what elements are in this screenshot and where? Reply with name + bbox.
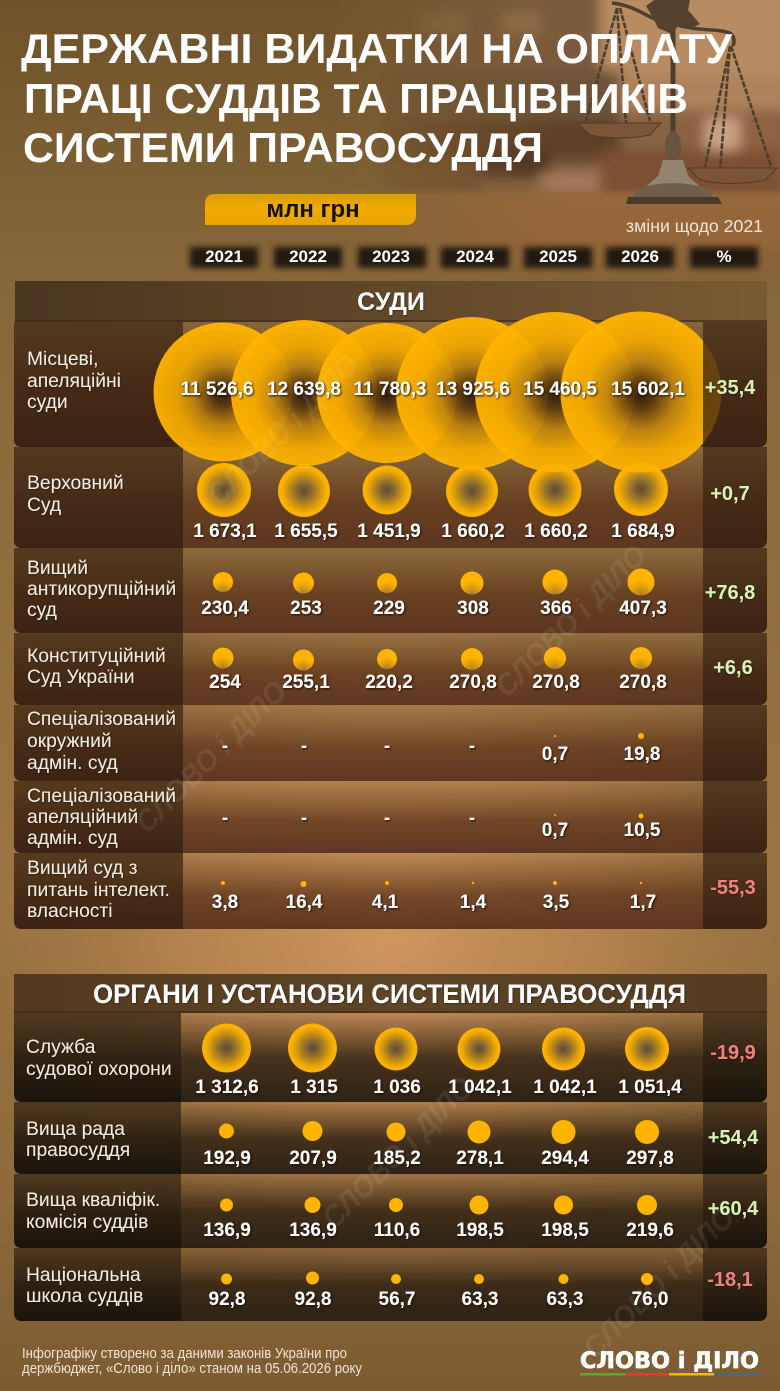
watermarks: СЛОВО і ДІЛО bbox=[314, 1069, 481, 1236]
panel: High Anti-Corruption Court row bbox=[14, 548, 767, 633]
panel: Specialized appeal admin court row: 0,7 bbox=[542, 820, 568, 841]
panel: local and appeal courts row: Місцеві, bbox=[27, 349, 98, 370]
panel: Constitutional Court row: 220,2 bbox=[365, 672, 413, 693]
panel: Court Security Service row: 1 042,1 bbox=[533, 1077, 597, 1098]
panel: High Anti-Corruption Court row: 366 bbox=[540, 598, 572, 619]
title: СИСТЕМИ ПРАВОСУДДЯ bbox=[23, 124, 543, 171]
panel: High Qualification Commission row: Вища кваліфік. bbox=[26, 1190, 160, 1211]
panel: National School of Judges row: Національна bbox=[26, 1265, 141, 1286]
panel: Specialized appeal admin court row: - bbox=[469, 808, 475, 829]
unit badge: млн грн: млн грн bbox=[266, 196, 360, 223]
panel: High Council of Justice row: 294,4 bbox=[541, 1148, 589, 1169]
panel: Specialized district admin court row bbox=[14, 705, 767, 781]
panel: National School of Judges row: 92,8 bbox=[209, 1289, 245, 1310]
year header: 2024 bbox=[456, 247, 494, 266]
panel: Constitutional Court row: +6,6 bbox=[713, 657, 753, 679]
panel: Court Security Service row: -19,9 bbox=[710, 1042, 756, 1064]
panel: High Qualification Commission row: +60,4 bbox=[708, 1198, 759, 1220]
panel: Court Security Service row: судової охорони bbox=[26, 1059, 172, 1080]
panel: Court Security Service row: 1 315 bbox=[290, 1077, 338, 1098]
year header: 2021 bbox=[205, 247, 243, 266]
panel: Constitutional Court row: 254 bbox=[209, 672, 241, 693]
year header: % bbox=[716, 247, 732, 266]
panel: National School of Judges row: 92,8 bbox=[295, 1289, 331, 1310]
panel: Specialized district admin court row: окружний bbox=[27, 731, 112, 752]
panel: Constitutional Court row: 255,1 bbox=[282, 672, 330, 693]
panel: High Qualification Commission row: 198,5 bbox=[541, 1220, 589, 1241]
panel: Specialized appeal admin court row bbox=[14, 781, 767, 853]
panel: High IP Court row: 3,8 bbox=[212, 892, 238, 913]
panel: Constitutional Court row: Конституційний bbox=[27, 646, 166, 667]
panel: Supreme Court row: 1 673,1 bbox=[193, 521, 257, 542]
panel: High Council of Justice row: 278,1 bbox=[456, 1148, 504, 1169]
panel: High IP Court row: 1,4 bbox=[460, 892, 487, 913]
unit badge: млн грн bbox=[205, 194, 416, 225]
panel: Specialized appeal admin court row: - bbox=[301, 808, 307, 829]
panel: High Anti-Corruption Court row: +76,8 bbox=[705, 582, 755, 604]
panel: Supreme Court row: 1 684,9 bbox=[611, 521, 675, 542]
panel: Court Security Service row: 1 036 bbox=[373, 1077, 421, 1098]
pans bbox=[577, 123, 661, 138]
footer source note: держбюджет, «Слово і діло» станом на 05.06.2026 року bbox=[22, 1361, 363, 1377]
panel: High Anti-Corruption Court row: 229 bbox=[373, 598, 405, 619]
watermarks: СЛОВО і ДІЛО bbox=[127, 673, 294, 840]
panel: local and appeal courts row: 11 780,3 bbox=[354, 379, 426, 400]
note: changes since 2021: зміни щодо 2021 bbox=[626, 216, 763, 236]
footer source note bbox=[22, 1346, 363, 1377]
panel: High Anti-Corruption Court row: 253 bbox=[290, 598, 322, 619]
panel: National School of Judges row: 56,7 bbox=[379, 1289, 415, 1310]
panel: High IP Court row: власності bbox=[27, 901, 113, 922]
panel: National School of Judges row: 63,3 bbox=[547, 1289, 583, 1310]
panel: High Qualification Commission row: 110,6 bbox=[374, 1220, 420, 1241]
panel: Supreme Court row: 1 451,9 bbox=[357, 521, 421, 542]
background photo: courtroom bbox=[393, 0, 780, 254]
panel: Specialized appeal admin court row: апеляційний bbox=[27, 807, 138, 828]
section heading: courts bbox=[15, 281, 767, 322]
year header: 2022 bbox=[289, 247, 327, 266]
title: ДЕРЖАВНІ ВИДАТКИ НА ОПЛАТУ bbox=[21, 25, 733, 72]
footer source note: Інфографіку створено за даними законів України про bbox=[22, 1346, 347, 1362]
panel: High IP Court row: 1,7 bbox=[630, 892, 656, 913]
panel: National School of Judges row bbox=[14, 1248, 767, 1321]
panel: National School of Judges row: 76,0 bbox=[632, 1289, 668, 1310]
watermarks bbox=[127, 346, 742, 1366]
panel: High IP Court row: 16,4 bbox=[286, 892, 323, 913]
panel: Supreme Court row: +0,7 bbox=[710, 483, 750, 505]
panel: Specialized district admin court row: 0,7 bbox=[542, 744, 568, 765]
panel: Specialized district admin court row: 19,8 bbox=[624, 744, 660, 765]
panel: High IP Court row: -55,3 bbox=[710, 877, 756, 899]
panel: High Qualification Commission row: 136,9 bbox=[289, 1220, 337, 1241]
panel: High Anti-Corruption Court row: 308 bbox=[457, 598, 489, 619]
panel: Constitutional Court row bbox=[14, 633, 767, 705]
panel: Supreme Court row: 1 660,2 bbox=[441, 521, 505, 542]
panel: High IP Court row bbox=[14, 853, 767, 929]
panel: High Council of Justice row bbox=[14, 1102, 767, 1174]
panel: local and appeal courts row: 12 639,8 bbox=[267, 379, 341, 400]
panel: Constitutional Court row: 270,8 bbox=[619, 672, 667, 693]
panel: Supreme Court row: Верховний bbox=[27, 473, 124, 494]
year header: 2023 bbox=[372, 247, 410, 266]
panel: High IP Court row: Вищий суд з bbox=[27, 858, 138, 879]
panel: local and appeal courts row: апеляційні bbox=[27, 371, 121, 392]
year header: 2025 bbox=[539, 247, 577, 266]
panel: Specialized appeal admin court row: адмін. суд bbox=[27, 828, 118, 849]
section heading: justice bodies bbox=[14, 974, 767, 1013]
panel: Specialized district admin court row: адмін. суд bbox=[27, 753, 118, 774]
panel: High Qualification Commission row bbox=[14, 1174, 767, 1248]
panel: local and appeal courts row: 13 925,6 bbox=[436, 379, 510, 400]
panel: National School of Judges row: школа суддів bbox=[26, 1286, 143, 1307]
panel: Specialized district admin court row: - bbox=[222, 736, 228, 757]
panel: Specialized district admin court row: - bbox=[469, 736, 475, 757]
panel: High Anti-Corruption Court row: антикорупційний bbox=[27, 579, 176, 600]
panel: High Qualification Commission row: 219,6 bbox=[626, 1220, 674, 1241]
panel: Specialized district admin court row: - bbox=[384, 736, 390, 757]
panel: High Council of Justice row: +54,4 bbox=[708, 1127, 759, 1149]
panel: High Council of Justice row: 185,2 bbox=[373, 1148, 421, 1169]
panel: Supreme Court row: 1 660,2 bbox=[524, 521, 588, 542]
panel: High Qualification Commission row: 136,9 bbox=[203, 1220, 251, 1241]
watermarks: СЛОВО і ДІЛО bbox=[575, 1199, 742, 1366]
panel: High Anti-Corruption Court row: 407,3 bbox=[619, 598, 667, 619]
panel: High IP Court row: питань інтелект. bbox=[27, 880, 170, 901]
panel: Court Security Service row: 1 312,6 bbox=[195, 1077, 259, 1098]
panel: Specialized appeal admin court row: - bbox=[384, 808, 390, 829]
panel: local and appeal courts row: 15 460,5 bbox=[523, 379, 597, 400]
panel: High Anti-Corruption Court row: 230,4 bbox=[201, 598, 249, 619]
year header: 2026 bbox=[621, 247, 659, 266]
panel: High Anti-Corruption Court row: Вищий bbox=[27, 558, 88, 579]
year header bbox=[190, 247, 758, 268]
panel: Constitutional Court row: Суд України bbox=[27, 667, 135, 688]
panel: local and appeal courts row: 15 602,1 bbox=[611, 379, 685, 400]
panel: High Council of Justice row: 207,9 bbox=[289, 1148, 337, 1169]
logo: Слово і Діло: СЛОВО і ДІЛО bbox=[580, 1349, 759, 1374]
panel: local and appeal courts row: 11 526,6 bbox=[181, 379, 253, 400]
panel: High Council of Justice row: Вища рада bbox=[26, 1119, 125, 1140]
panel: Supreme Court row: 1 655,5 bbox=[274, 521, 338, 542]
panel: Specialized appeal admin court row: Спеціалізований bbox=[27, 786, 176, 807]
panel: Specialized district admin court row: Спеціалізований bbox=[27, 709, 176, 730]
panel: local and appeal courts row: +35,4 bbox=[705, 377, 756, 399]
panel: local and appeal courts row: суди bbox=[27, 392, 68, 413]
panel: High Qualification Commission row: комісія суддів bbox=[26, 1212, 148, 1233]
section heading: justice bodies: ОРГАНИ І УСТАНОВИ СИСТЕМИ ПРАВОСУДДЯ bbox=[93, 979, 686, 1009]
panel: High Qualification Commission row: 198,5 bbox=[456, 1220, 504, 1241]
panel: Specialized appeal admin court row: - bbox=[222, 808, 228, 829]
panel: Specialized district admin court row: - bbox=[301, 736, 307, 757]
panel: National School of Judges row: -18,1 bbox=[707, 1269, 753, 1291]
title bbox=[21, 25, 733, 171]
panel: Constitutional Court row: 270,8 bbox=[532, 672, 580, 693]
panel: Court Security Service row: 1 051,4 bbox=[618, 1077, 682, 1098]
panel: Court Security Service row: 1 042,1 bbox=[448, 1077, 512, 1098]
title: ПРАЦІ СУДДІВ ТА ПРАЦІВНИКІВ bbox=[24, 75, 688, 122]
panel: Supreme Court row bbox=[14, 447, 767, 548]
icon: scales of justice bbox=[577, 0, 777, 204]
panel: High Council of Justice row: правосуддя bbox=[26, 1140, 130, 1161]
panel: National School of Judges row: 63,3 bbox=[462, 1289, 498, 1310]
panel: High IP Court row: 3,5 bbox=[543, 892, 570, 913]
panel: Specialized appeal admin court row: 10,5 bbox=[624, 820, 661, 841]
panel: High Council of Justice row: 297,8 bbox=[626, 1148, 674, 1169]
stand bbox=[665, 131, 681, 161]
panel: Court Security Service row bbox=[14, 1013, 767, 1102]
panel: High IP Court row: 4,1 bbox=[372, 892, 399, 913]
panel: Court Security Service row: Служба bbox=[26, 1037, 96, 1058]
panel: Supreme Court row: Суд bbox=[27, 495, 61, 516]
watermarks: СЛОВО і ДІЛО bbox=[199, 346, 366, 513]
panel: High Anti-Corruption Court row: суд bbox=[27, 600, 57, 621]
watermarks: СЛОВО і ДІЛО bbox=[487, 537, 654, 704]
panel: local and appeal courts row bbox=[14, 312, 767, 472]
panel: High Council of Justice row: 192,9 bbox=[203, 1148, 251, 1169]
section heading: courts: СУДИ bbox=[357, 288, 425, 316]
bubbles: local courts values bbox=[154, 312, 722, 472]
panel: Constitutional Court row: 270,8 bbox=[449, 672, 497, 693]
